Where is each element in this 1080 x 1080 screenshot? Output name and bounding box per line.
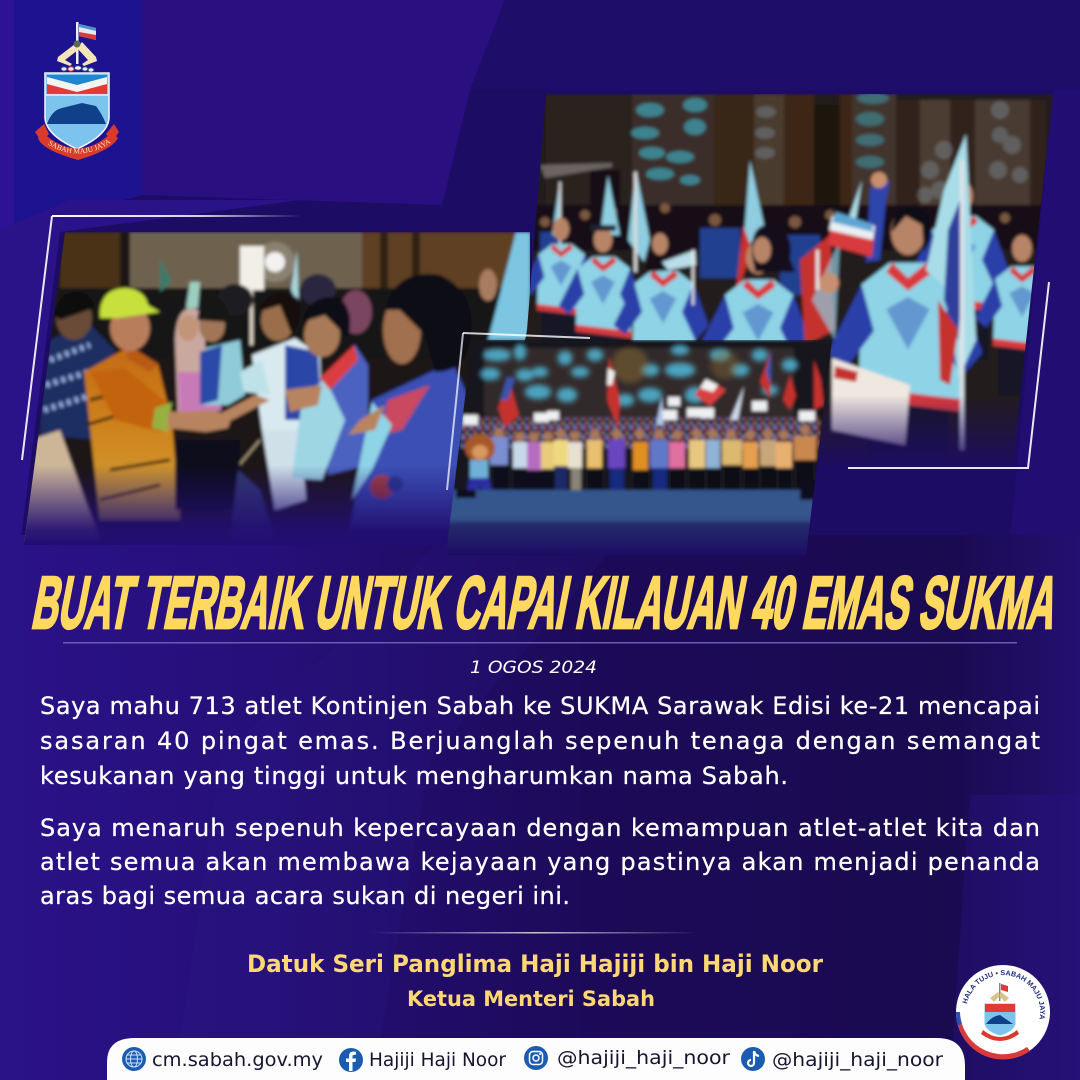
photo: chief minister greeting athletes [20, 232, 540, 552]
icon: facebook [339, 1048, 363, 1072]
tiktok handle: @hajiji_haji_noor [772, 1049, 943, 1071]
hands [57, 42, 97, 66]
beads [61, 66, 94, 72]
name card [832, 358, 910, 445]
left batik man [40, 320, 115, 440]
instagram handle: @hajiji_haji_noor [557, 1047, 730, 1069]
paragraph two: atlet semua akan membawa kejayaan yang pastinya akan menjadi penanda [40, 848, 1040, 876]
shield [45, 73, 109, 149]
main man [84, 346, 180, 520]
photo: contingent group on stage [440, 340, 840, 555]
icon: instagram [524, 1046, 548, 1070]
athlete handshake [252, 338, 322, 430]
website: cm.sabah.gov.my [152, 1049, 323, 1071]
logo: Hala Tuju: HALA TUJU • SABAH MAJU JAYA [962, 970, 1046, 1020]
paragraph one: Saya mahu 713 atlet Kontinjen Sabah ke SUKMA Sarawak Edisi ke-21 mencapai [40, 692, 1040, 720]
man in blue-white [200, 340, 245, 405]
flag right [488, 232, 530, 340]
paragraph one [40, 692, 1040, 790]
flags on stage [498, 350, 824, 428]
icon: globe [122, 1047, 146, 1071]
photo: athletes with flags [525, 94, 1053, 470]
back man + jackets [910, 181, 1010, 360]
flags rear [552, 180, 560, 235]
photo frame lines [22, 215, 1049, 490]
signatory name: Datuk Seri Panglima Haji Hajiji bin Haji Noor [247, 950, 823, 978]
social media bar [107, 1038, 965, 1080]
big flag [926, 134, 976, 380]
main woman [866, 178, 890, 262]
group row [490, 425, 816, 492]
state crest [35, 22, 119, 160]
athlete two [320, 345, 368, 475]
mascot [465, 434, 498, 505]
paragraph two: aras bagi semua acara sukan di negeri ini. [40, 882, 570, 910]
athlete three foreground [350, 362, 470, 530]
stage floor [450, 486, 813, 524]
signatory title: Ketua Menteri Sabah [407, 987, 655, 1011]
date: 1 OGOS 2024 [470, 658, 597, 678]
paragraph one: kesukanan yang tinggi untuk mengharumkan nama Sabah. [40, 762, 788, 790]
flag on pole [76, 22, 96, 64]
facebook name: Hajiji Haji Noor [369, 1049, 506, 1071]
paragraph two [40, 814, 1040, 910]
paragraph one: sasaran 40 pingat emas. Berjuanglah sepenuh tenaga dengan semangat [40, 727, 1040, 755]
woman hijab [172, 306, 208, 414]
icon: tiktok [741, 1047, 765, 1071]
title rule [63, 642, 1017, 644]
paragraph two: Saya menaruh sepenuh kepercayaan dengan kemampuan atlet-atlet kita dan [40, 814, 1040, 842]
signature divider [370, 932, 700, 934]
logo: Hala Tuju [956, 965, 1050, 1060]
ribbon: SABAH MAJU JAYA [48, 140, 111, 154]
